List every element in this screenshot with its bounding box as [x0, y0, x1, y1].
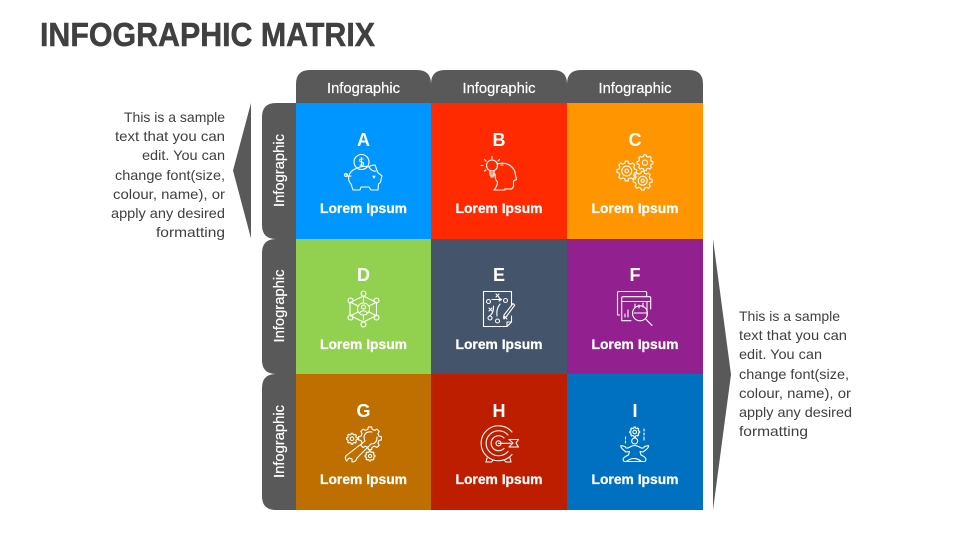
panel: I: Lorem Ipsum: [592, 471, 678, 487]
icon: network: [348, 291, 379, 327]
panel: H: [431, 374, 567, 510]
panel: A: [296, 103, 431, 239]
row header 1: [262, 103, 297, 239]
right text block: apply any desired: [739, 404, 852, 420]
right text block: edit. You can: [739, 346, 822, 362]
panel: E: E: [493, 265, 505, 285]
left text block: This is a sample: [124, 109, 225, 125]
panel: D: Lorem Ipsum: [320, 336, 407, 352]
panel: B: [431, 103, 567, 239]
row header 2: [262, 239, 297, 374]
panel: B: B: [492, 130, 506, 150]
row headers: [262, 103, 297, 510]
column header 1: [296, 70, 431, 104]
panel: G: Lorem Ipsum: [320, 471, 407, 487]
column header 3: [567, 70, 703, 104]
row header 3: [262, 374, 297, 510]
icon: strategy plan: [484, 292, 515, 326]
left text block: change font(size,: [115, 167, 225, 183]
left arrow: [233, 103, 251, 238]
left text block: colour, name), or: [113, 186, 225, 202]
panel: A: A: [357, 130, 370, 150]
row header 2: Infographic: [272, 270, 288, 342]
icon: wrench and gears: [345, 427, 381, 462]
icon: target with arrow: [481, 426, 518, 462]
panel: H: H: [492, 401, 506, 421]
column header 2: Infographic: [462, 81, 536, 97]
right text block: change font(size,: [739, 366, 849, 382]
row header 1: Infographic: [272, 134, 288, 207]
left text block: apply any desired: [111, 205, 225, 221]
panel: H: Lorem Ipsum: [456, 471, 542, 487]
column header 1: Infographic: [327, 81, 400, 97]
panel: F: Lorem Ipsum: [592, 336, 678, 352]
panel: I: [567, 374, 703, 510]
panel: E: Lorem Ipsum: [456, 336, 542, 352]
left text block: [111, 109, 225, 240]
panel: F: F: [630, 265, 640, 285]
left text block: formatting: [156, 224, 225, 240]
panel: I: I: [632, 401, 638, 421]
left text block: edit. You can: [142, 147, 225, 163]
left text block: text that you can: [115, 128, 225, 144]
icon: gears: [617, 155, 653, 190]
icon: piggy bank: [344, 154, 382, 190]
right text block: formatting: [739, 423, 808, 439]
panel: G: G: [356, 401, 371, 421]
right text block: [739, 308, 852, 439]
column headers: [296, 70, 703, 104]
panel: C: [567, 103, 703, 239]
panel: D: [296, 239, 431, 374]
panel: A: Lorem Ipsum: [320, 200, 407, 216]
icon: meditating person: [621, 427, 649, 462]
column header 3: Infographic: [598, 81, 672, 97]
panel: D: D: [357, 265, 370, 285]
title: INFOGRAPHIC MATRIX: [40, 16, 375, 53]
right text block: colour, name), or: [739, 385, 851, 401]
right text block: This is a sample: [739, 308, 840, 324]
right text block: text that you can: [739, 327, 847, 343]
panel: F: [567, 239, 703, 374]
panel: C: C: [628, 130, 642, 150]
panel: E: [431, 239, 567, 374]
panel: G: [296, 374, 431, 510]
right arrow: [713, 239, 731, 510]
icon: head with light bulb: [481, 156, 516, 190]
row header 3: Infographic: [272, 405, 288, 478]
icon: data analysis windows: [618, 292, 652, 326]
panel: B: Lorem Ipsum: [456, 200, 542, 216]
panel: C: Lorem Ipsum: [592, 200, 678, 216]
column header 2: [431, 70, 567, 104]
